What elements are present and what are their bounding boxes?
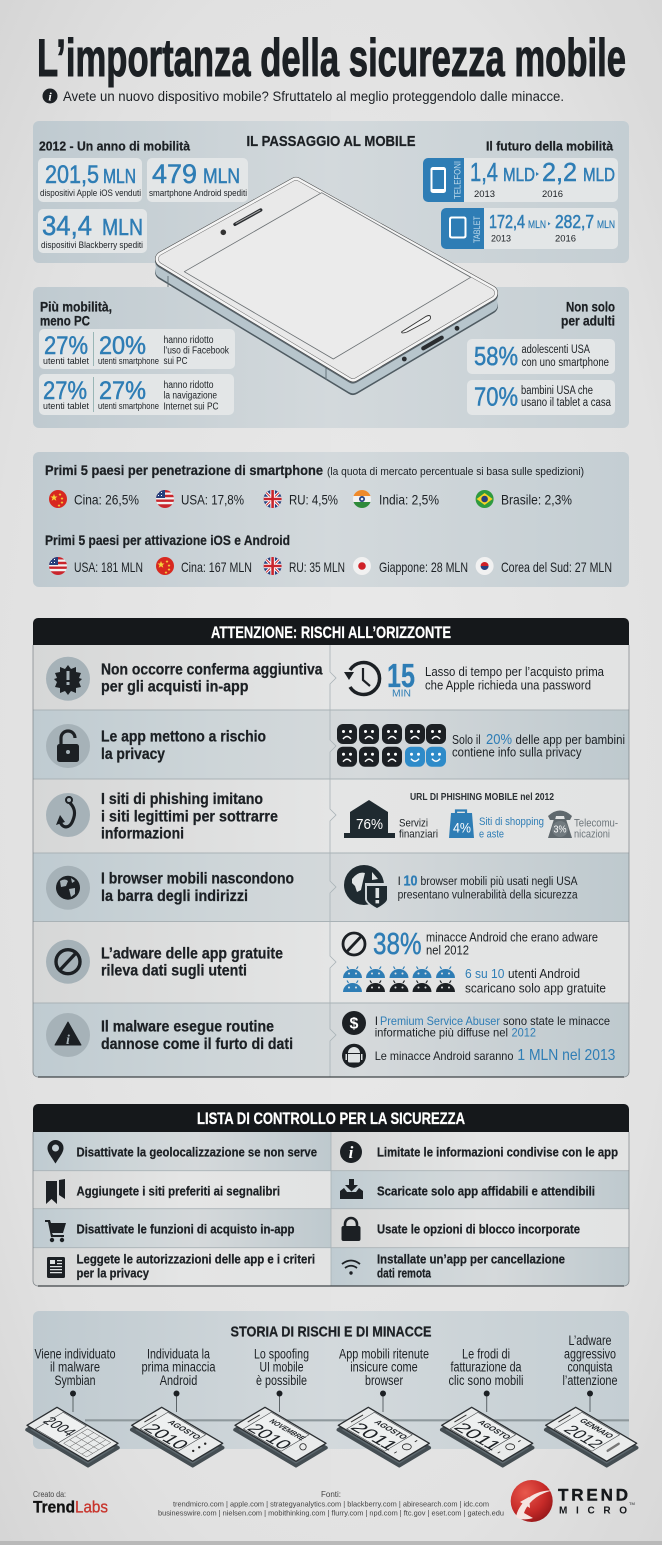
stat: tablet: 2016	[555, 234, 576, 244]
row: adware: minacce Android che erano adware	[426, 931, 598, 945]
logo: Trend Micro: TREND	[558, 1486, 628, 1505]
icon: lock	[342, 1218, 360, 1241]
sources	[158, 1490, 504, 1517]
event: 2004: Symbian	[54, 1373, 96, 1388]
icon: wifi	[342, 1260, 360, 1275]
event: gennaio 2012: l’attenzione	[562, 1373, 618, 1388]
sources: Fonti:	[321, 1490, 341, 1499]
event: agosto 2011 frodi: clic sono mobili	[448, 1373, 524, 1388]
flag row: attivazione: Giappone: 28 MLN	[379, 559, 468, 575]
event: agosto 2011	[338, 1346, 429, 1466]
flag row: attivazione: Cina: 167 MLN	[181, 559, 252, 575]
event: gennaio 2012: 2012	[559, 1423, 608, 1451]
panel: lista di controllo	[33, 1104, 629, 1286]
event: gennaio 2012: L’adware	[568, 1333, 612, 1348]
row: malware: 1 MLN nel 2013	[517, 1047, 615, 1064]
icon: clock	[344, 662, 380, 694]
heading: non solo per adulti: Non solo	[566, 300, 615, 314]
row: malware: sono state le minacce	[503, 1014, 610, 1028]
row: adware: L’adware delle app gratuite	[101, 945, 283, 962]
icon: bag	[449, 810, 474, 838]
stat: facebook: hanno ridotto	[164, 335, 214, 346]
heading: URL: URL DI PHISHING MOBILE nel 2012	[410, 791, 554, 803]
stat: navigazione: 27%	[99, 377, 146, 405]
icon: faces	[337, 724, 446, 767]
flag row: attivazione	[49, 557, 612, 575]
icon: bookmark	[46, 1179, 65, 1204]
text: Scaricate solo app affidabili e attendibili	[377, 1185, 595, 1199]
row: privacy: 20%	[486, 731, 512, 748]
flag row: penetrazione: Cina: 26,5%	[74, 492, 139, 508]
heading: più mobilità: Più mobilità,	[40, 300, 112, 314]
header: LISTA DI CONTROLLO PER LA SICUREZZA	[197, 1110, 465, 1128]
stat: Blackberry	[38, 209, 147, 253]
text	[76, 1252, 315, 1280]
row: adware: nel 2012	[426, 943, 469, 957]
text: Usate le opzioni di blocco incorporate	[377, 1222, 580, 1236]
stat: facebook: l’uso di Facebook	[164, 346, 230, 357]
row: phishing: nicazioni	[574, 829, 610, 841]
row: browser	[46, 865, 578, 910]
row: phishing: informazioni	[101, 826, 184, 843]
row: phishing	[46, 791, 618, 843]
row: malware: Il malware esegue routine	[101, 1019, 274, 1036]
row: phishing: Telecomu-	[574, 818, 618, 830]
stat: bambini: bambini USA che	[521, 385, 593, 397]
row: adware	[46, 926, 606, 996]
icon: hook	[46, 793, 90, 837]
event: gennaio 2012	[546, 1333, 637, 1466]
row: malware: I	[375, 1014, 378, 1028]
event: novembre 2010: 2010	[243, 1421, 296, 1452]
icon: dollar	[342, 1011, 366, 1035]
row: adware: 38%	[373, 926, 422, 961]
stat: tablet: MLN	[528, 219, 546, 231]
stat: Blackberry: MLN	[102, 214, 143, 240]
text: Leggete le autorizzazioni delle app e i criteri	[76, 1252, 315, 1266]
flag row: penetrazione: India: 2,5%	[379, 492, 439, 508]
icon: info	[42, 88, 58, 104]
icon: burst	[46, 657, 90, 701]
stat: navigazione: utenti tablet	[43, 401, 89, 412]
home button	[402, 316, 431, 333]
heading: futuro: Il futuro della mobilità	[486, 138, 614, 154]
stat: navigazione: Internet sui PC	[164, 401, 218, 412]
icon: bag: 4%	[453, 820, 471, 836]
heading: penetrazione: Primi 5 paesi per penetrazione di smartphone	[45, 462, 323, 478]
icon: telephone: 3%	[554, 824, 567, 836]
event: 2004: Viene individuato	[34, 1346, 116, 1361]
stat: navigazione: utenti smartphone	[98, 401, 159, 412]
text: Limitate le informazioni condivise con le app	[377, 1146, 618, 1160]
flag row: attivazione: Corea del Sud: 27 MLN	[501, 559, 612, 575]
row: malware: 2012	[512, 1026, 536, 1040]
jack	[402, 357, 407, 361]
row: phishing: finanziari	[399, 829, 438, 841]
flag row: penetrazione: Brasile: 2,3%	[501, 492, 572, 508]
flag: RU	[264, 490, 282, 508]
stat: telefoni: 2016	[542, 189, 563, 200]
event: agosto 2010: 2010	[139, 1421, 193, 1452]
event: novembre 2010: Lo spoofing	[254, 1346, 309, 1361]
row: privacy: la privacy	[101, 746, 165, 763]
credit: TrendLabs: Trend	[33, 1498, 75, 1517]
stat: bambini	[467, 380, 615, 415]
stat: facebook: utenti tablet	[43, 356, 89, 367]
stat: telefoni: MLD	[503, 165, 535, 185]
row: browser: la barra degli indirizzi	[101, 888, 248, 905]
event: novembre 2010: è possibile	[256, 1373, 307, 1388]
event: novembre 2010	[235, 1346, 326, 1466]
icon: download	[340, 1179, 363, 1199]
stat: Android: MLN	[203, 165, 240, 188]
stat: tablet: 282,7	[555, 212, 594, 232]
flag: Corea del Sud	[476, 557, 494, 575]
stat: tablet: 172,4	[489, 212, 525, 232]
stat: tablet: TABLET	[472, 216, 483, 243]
stat: Apple iOS: 201,5	[45, 161, 99, 189]
event: agosto 2011 frodi: AGOSTO	[475, 1418, 514, 1441]
header: ATTENZIONE: RISCHI ALL’ORIZZONTE	[211, 624, 451, 642]
heading: non solo per adulti	[561, 300, 615, 328]
credit: TrendLabs: Creato da:	[33, 1490, 66, 1499]
flag: USA	[49, 557, 67, 575]
flag: Cina	[49, 490, 67, 508]
row: browser: 10	[404, 874, 418, 890]
row: phishing: e aste	[479, 829, 504, 841]
row: malware	[46, 1011, 615, 1068]
text: Disattivate la geolocalizzazione se non serve	[76, 1146, 317, 1160]
flag row: attivazione: RU: 35 MLN	[289, 559, 345, 575]
row: phishing: Siti di shopping	[479, 816, 544, 828]
camera	[220, 230, 226, 235]
logo: Trend Micro: MICRO	[559, 1505, 627, 1516]
event: agosto 2011 frodi: 2011	[449, 1420, 506, 1453]
stat: telefoni: MLD	[583, 165, 615, 185]
note: (la quota di mercato percentuale si basa sulle spedizioni)	[327, 466, 584, 478]
text: Aggiungete i siti preferiti ai segnalibri	[76, 1185, 280, 1199]
heading: IL PASSAGGIO AL MOBILE	[246, 133, 416, 150]
row: privacy	[46, 724, 625, 768]
stat: facebook: 27%	[44, 332, 88, 360]
row: browser: I browser mobili nascondono	[101, 870, 294, 887]
icon: warning	[46, 1013, 90, 1057]
row: phishing: i siti legittimi per sottrarre	[101, 809, 278, 826]
stat: adolescenti: 58%	[474, 341, 518, 371]
stat: Apple iOS	[38, 158, 142, 202]
stat: tablet	[441, 208, 618, 249]
stat: tablet: MLN	[597, 219, 615, 231]
heading: non solo per adulti: per adulti	[561, 314, 615, 328]
panel: più mobilità / non solo per adulti	[33, 287, 629, 428]
event: agosto 2011: App mobili ritenute	[339, 1346, 429, 1361]
panel: storia	[27, 1311, 637, 1466]
event: agosto 2011: AGOSTO	[372, 1418, 410, 1441]
stat: telefoni: 2013	[474, 189, 495, 200]
logo: Trend Micro	[511, 1480, 635, 1522]
icon: telephone	[548, 810, 572, 838]
credit: TrendLabs: Labs	[75, 1498, 108, 1517]
event: agosto 2011 frodi	[442, 1346, 533, 1466]
icon: dollar: $	[350, 1016, 359, 1032]
row: acquisti in-app: per gli acquisti in-app	[101, 679, 248, 696]
stat: navigazione	[39, 374, 234, 415]
event: agosto 2010: Individuata la	[147, 1346, 210, 1361]
text: Installate un’app per cancellazione	[377, 1252, 565, 1266]
text: Disattivate le funzioni di acquisto in-app	[76, 1222, 295, 1236]
event: novembre 2010: NOVEMBRE	[267, 1418, 308, 1442]
stat: navigazione: la navigazione	[164, 391, 217, 402]
heading: attivazione: Primi 5 paesi per attivazione iOS e Android	[45, 532, 290, 548]
event: 2004: 2004	[39, 1415, 79, 1439]
logo: Trend Micro: TM	[629, 1501, 635, 1506]
icon: divieto piccolo	[343, 933, 365, 955]
row: malware: Le minacce Android saranno	[375, 1049, 514, 1063]
sources: trendmicro.com | apple.com | strategyanalytics.com | blackberry.com | abiresearch.com | idc.com	[173, 1500, 489, 1509]
icon: globe with shield	[344, 865, 389, 910]
stat: adolescenti	[467, 339, 615, 374]
icon: lock	[46, 724, 90, 768]
stat: telefoni: 2,2	[542, 157, 577, 187]
icon: divieto	[46, 940, 90, 984]
stat: facebook: 20%	[99, 332, 146, 360]
event: gennaio 2012: conquista	[568, 1360, 613, 1375]
row: malware: informatiche più diffuse nel	[375, 1026, 508, 1040]
text	[377, 1252, 565, 1280]
event: agosto 2010: AGOSTO	[165, 1418, 204, 1441]
heading: STORIA DI RISCHI E DI MINACCE	[230, 1324, 432, 1341]
event: agosto 2011 frodi: fatturazione da	[450, 1360, 522, 1375]
stat: Apple iOS: MLN	[103, 166, 136, 188]
stat: adolescenti: adolescenti USA	[522, 344, 590, 356]
port	[423, 338, 442, 348]
row: acquisti in-app: Lasso di tempo per l’acquisto prima	[425, 665, 604, 679]
row: acquisti in-app: 15	[387, 657, 415, 694]
stat: Android	[147, 158, 248, 202]
row: privacy: delle app per bambini	[516, 733, 625, 747]
icon: cart	[45, 1220, 66, 1242]
icon: info: i	[48, 90, 52, 104]
subtitle: Avete un nuovo dispositivo mobile? Sfruttatelo al meglio proteggendolo dalle minacce.	[63, 89, 564, 104]
icon: globe	[46, 866, 90, 910]
stat: bambini: 70%	[474, 382, 518, 412]
row: browser: presentano vulnerabilità della sicurezza	[398, 890, 578, 902]
heading: più mobilità	[40, 300, 112, 328]
heading: più mobilità: meno PC	[40, 314, 90, 328]
sources: businesswire.com | nielsen.com | mobithinking.com | flurry.com | npd.com | ftc.gov | eset.com | gatech.edu	[158, 1508, 504, 1517]
heading: 2012: 2012 - Un anno di mobilità	[39, 138, 191, 154]
event: 2004: il malware	[50, 1360, 100, 1375]
row: privacy: Le app mettono a rischio	[101, 729, 266, 746]
stat: facebook	[39, 329, 235, 369]
stat: facebook: utenti smartphone	[98, 356, 159, 367]
row: privacy: contiene info sulla privacy	[452, 746, 582, 760]
credit: TrendLabs	[33, 1490, 108, 1517]
row: adware: rileva dati sugli utenti	[101, 963, 247, 980]
row: adware: 6 su 10	[465, 966, 504, 981]
row: browser: browser mobili più usati negli USA	[420, 876, 578, 888]
icon: red ball	[511, 1480, 553, 1522]
stat: facebook: sui PC	[164, 356, 188, 367]
stat: Blackberry: 34,4	[42, 210, 92, 241]
event: gennaio 2012: GENNAIO	[577, 1417, 617, 1440]
icon: bank: 76%	[356, 816, 383, 833]
event: gennaio 2012: aggressivo	[564, 1346, 616, 1361]
event: agosto 2011: insicure come	[350, 1360, 418, 1375]
row: adware: utenti Android	[508, 966, 580, 981]
flag row: penetrazione: RU: 4,5%	[289, 492, 338, 508]
event: agosto 2011: 2011	[346, 1420, 403, 1453]
stat: Android: 479	[152, 159, 197, 189]
row: privacy: Solo il	[452, 733, 481, 747]
row: acquisti in-app: MIN	[392, 689, 411, 700]
rows	[33, 1132, 629, 1286]
flag: India	[353, 490, 371, 508]
event: agosto 2011: browser	[365, 1373, 403, 1388]
event: novembre 2010: UI mobile	[260, 1360, 304, 1375]
stat: adolescenti: con uno smartphone	[522, 357, 609, 369]
icon: info	[340, 1141, 362, 1163]
row: acquisti in-app: che Apple richieda una password	[425, 678, 591, 692]
stat: Blackberry: dispositivi Blackberry spediti	[41, 240, 143, 251]
icon: androids	[343, 966, 455, 992]
event: agosto 2010	[132, 1346, 223, 1466]
flag row: attivazione: USA: 181 MLN	[74, 559, 143, 575]
text: per la privacy	[76, 1266, 149, 1280]
row: malware: Premium Service Abuser	[380, 1014, 500, 1028]
header	[33, 618, 629, 645]
event: 2004	[27, 1346, 118, 1466]
panel: rischi	[33, 618, 629, 1077]
timeline line	[70, 1390, 629, 1420]
flag row: penetrazione	[49, 490, 572, 508]
row: phishing: I siti di phishing imitano	[101, 791, 263, 808]
text: dati remota	[377, 1266, 432, 1280]
panel: il passaggio al mobile	[33, 121, 629, 263]
row: adware: scaricano solo app gratuite	[465, 981, 606, 996]
event: agosto 2010: prima minaccia	[142, 1360, 216, 1375]
speaker	[235, 210, 261, 224]
icon: bank	[344, 800, 395, 838]
stat: telefoni: 1,4	[470, 157, 498, 187]
row: malware: dannose come il furto di dati	[101, 1036, 293, 1053]
icon: info: i	[349, 1143, 354, 1162]
flag: RU	[264, 557, 282, 575]
stat: navigazione: 27%	[43, 377, 87, 405]
row: phishing: Servizi	[399, 818, 428, 830]
stat: navigazione: hanno ridotto	[164, 380, 214, 391]
stat: Android: smartphone Android spediti	[149, 188, 247, 199]
illustration: smartphone	[163, 185, 490, 387]
icon: document	[47, 1257, 65, 1278]
flag: USA	[156, 490, 174, 508]
flag row: penetrazione: USA: 17,8%	[181, 492, 244, 508]
row: browser: I	[398, 876, 401, 888]
row: acquisti in-app	[46, 657, 604, 701]
icon: warning: i	[66, 1033, 70, 1048]
rows	[33, 645, 629, 1077]
event: agosto 2011 frodi: Le frodi di	[462, 1346, 510, 1361]
event: agosto 2010: Android	[160, 1373, 197, 1388]
flag: Giappone	[353, 557, 371, 575]
row: acquisti in-app: Non occorre conferma aggiuntiva	[101, 661, 323, 678]
icon: pin	[48, 1140, 64, 1164]
stat: telefoni	[423, 157, 618, 202]
screen	[184, 193, 471, 359]
header	[33, 1104, 629, 1132]
stat: Apple iOS: dispositivi Apple iOS venduti	[40, 188, 141, 199]
flag: Cina	[156, 557, 174, 575]
icon: android	[342, 1044, 366, 1068]
stat: bambini: usano il tablet a casa	[521, 397, 611, 409]
panel: primi 5 paesi	[33, 452, 629, 587]
flag: Brasile	[476, 490, 494, 508]
stat: telefoni: TELEFONI	[452, 161, 464, 199]
stat: tablet: 2013	[491, 234, 511, 244]
